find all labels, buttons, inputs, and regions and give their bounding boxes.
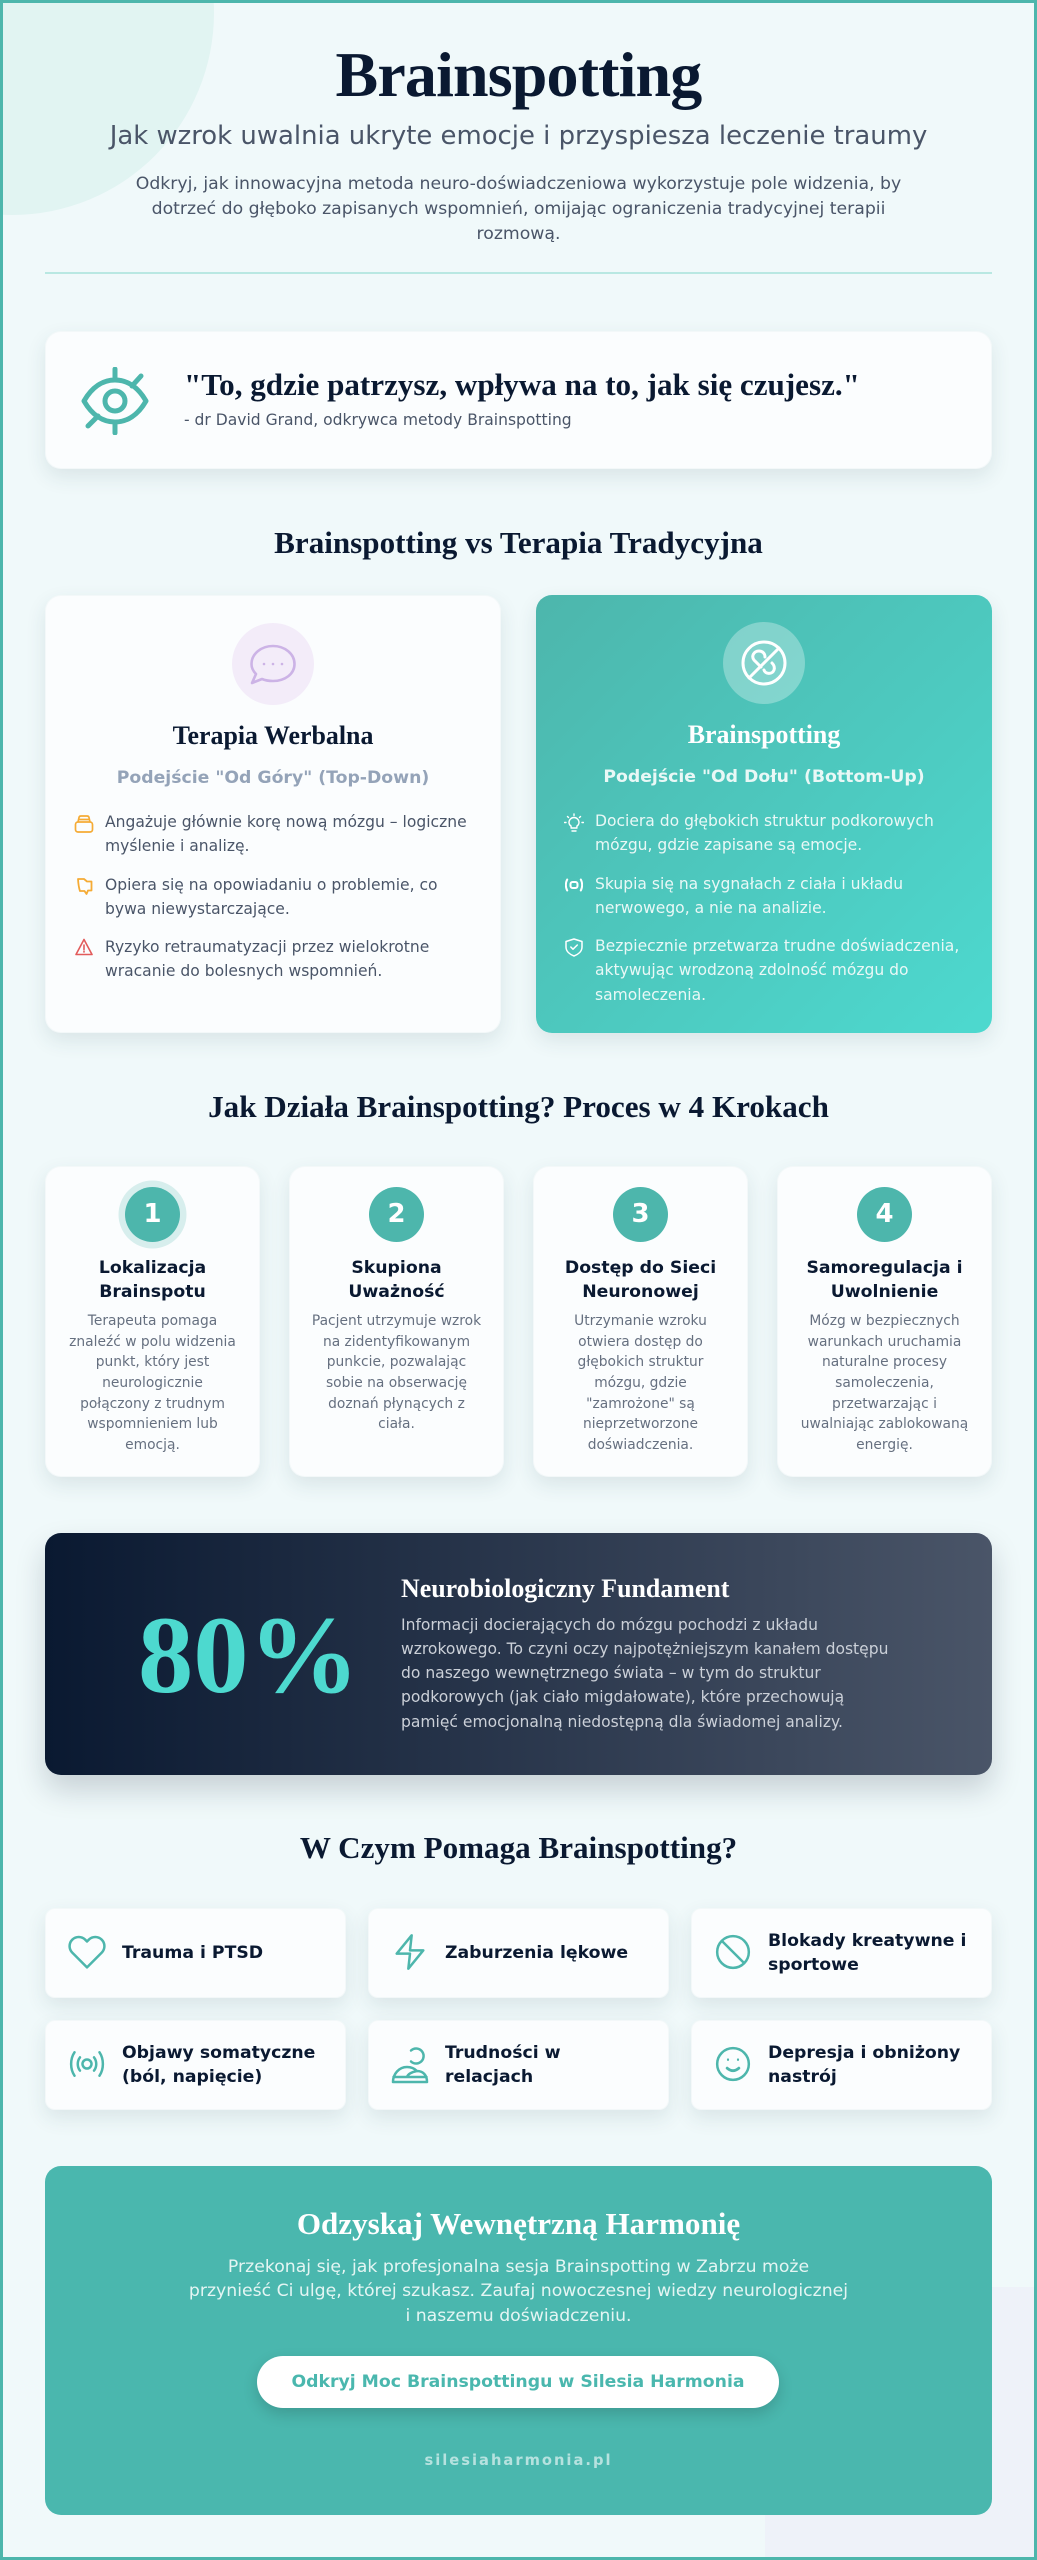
step text: połączony z trudnym [80,1396,225,1412]
step text [574,1313,707,1453]
intro text: Odkryj, jak innowacyjna metoda neuro-doświadczeniowa wykorzystuje pole widzenia, by [136,174,901,194]
label: sportowe [768,1955,859,1975]
label: relacjach [445,2067,533,2087]
list item [105,938,429,980]
item: relations [368,2020,669,2110]
list item: Skupia się na sygnałach z ciała i układu [595,875,903,893]
step title [348,1258,445,1302]
label [445,2043,561,2087]
icon: heart [68,1936,106,1969]
step number [857,1187,912,1242]
label: nastrój [768,2067,837,2087]
label: (ból, napięcie) [122,2067,262,2087]
step title: Uwolnienie [831,1282,938,1302]
subtitle: Jak wzrok uwalnia ukryte emocje i przyspiesza leczenie traumy [110,121,927,151]
label: Trudności w [445,2043,561,2063]
list item: Dociera do głębokich struktur podkorowych [595,812,934,830]
step title: Lokalizacja [99,1258,206,1278]
step text: uwalniając zablokowaną [801,1416,968,1432]
step 2 [289,1166,504,1477]
list item: myślenie i analizę. [105,837,249,855]
step title: Samoregulacja i [806,1258,963,1278]
step text: doświadczenia. [588,1437,693,1453]
heading: comparison: Brainspotting vs Terapia Tradycyjna [274,524,763,560]
quote text: "To, gdzie patrzysz, wpływa na to, jak się czujesz." [184,366,860,402]
heading: applications: W Czym Pomaga Brainspotting? [300,1830,737,1865]
card subtitle: Podejście "Od Góry" (Top-Down) [117,768,429,788]
step number: 4 [875,1199,894,1229]
label [122,2043,315,2087]
icon: radio waves [70,2051,104,2077]
cta text: i naszemu doświadczeniu. [405,2306,632,2326]
step text: głębokich struktur [578,1354,703,1370]
icon: warning triangle [75,938,93,956]
label: Zaburzenia lękowe [445,1943,628,1963]
icon: layers [74,815,94,833]
cta button: Odkryj Moc Brainspottingu w Silesia Harmonia [291,2372,745,2392]
card title: Brainspotting [688,720,840,749]
step text: znaleźć w polu widzenia [69,1334,236,1350]
step text: punkt, który jest [96,1354,209,1370]
step text: punkcie, pozwalając [327,1354,466,1370]
website: silesiaharmonia.pl [424,2452,612,2469]
item: somatic [45,2020,346,2110]
step number: 3 [631,1199,650,1229]
step 4 [777,1166,992,1477]
item: blocks [691,1908,992,1998]
step text: nieprzetworzone [583,1416,698,1432]
icon: person [392,2047,428,2084]
stat text: Informacji docierających do mózgu pochodzi z układu [401,1616,818,1634]
item: depression [691,2020,992,2110]
list item: bywa niewystarczające. [105,900,290,918]
step text: doznań płynących z [328,1396,465,1412]
step title: Dostęp do Sieci [565,1258,716,1278]
step text [312,1313,481,1432]
label: Depresja i obniżony [768,2043,960,2063]
icon: smile [716,2046,750,2082]
cta text: Przekonaj się, jak profesjonalna sesja Brainspotting w Zabrzu może [228,2257,809,2277]
step number [125,1187,180,1242]
cta button [257,2356,779,2408]
stat text: wzrokowego. To czyni oczy najpotężniejszym kanałem dostępu [401,1640,888,1658]
step number: 1 [143,1199,162,1229]
stat text: pamięć emocjonalną niedostępną dla świadomej analizy. [401,1713,843,1731]
cta title: Odzyskaj Wewnętrzną Harmonię [297,2206,740,2240]
step number [613,1187,668,1242]
step title: Neuronowej [582,1282,699,1302]
step title: Skupiona [351,1258,442,1278]
step text: warunkach uruchamia [808,1334,961,1350]
list item: Ryzyko retraumatyzacji przez wielokrotne [105,938,429,956]
heading: process: Jak Działa Brainspotting? Proces w 4 Krokach [208,1089,829,1124]
icon: note [77,878,92,895]
list item [105,812,467,855]
step 3 [533,1166,748,1477]
step text: otwiera dostęp do [578,1334,703,1350]
step number [369,1187,424,1242]
list item [595,937,959,1004]
panel: quote [45,331,992,469]
step title [565,1258,716,1302]
icon: bolt [395,1934,425,1970]
step title: Uważność [348,1282,445,1302]
item: trauma [45,1908,346,1998]
list item: mózgu, gdzie zapisane są emocje. [595,836,862,854]
stat text: podkorowych (jak ciało migdałowate), które przechowują [401,1688,844,1706]
label [768,2043,960,2087]
step title [806,1258,963,1302]
list item: Bezpiecznie przetwarza trudne doświadczenia, [595,937,959,955]
label: Blokady kreatywne i [768,1931,966,1951]
step title [99,1258,206,1302]
step text: emocją. [125,1437,180,1453]
step text [801,1313,968,1453]
stat title: Neurobiologiczny Fundament [401,1574,729,1603]
intro text [136,174,901,244]
intro text: rozmową. [477,224,560,244]
list item: wracanie do bolesnych wspomnień. [105,962,382,980]
panel: verbal therapy [45,595,501,1033]
icon: signal [565,878,583,892]
panel: brainspotting [536,595,992,1033]
title: Brainspotting [336,39,701,110]
list item: Opiera się na opowiadaniu o problemie, co [105,876,438,894]
step text: samoleczenia, [835,1375,934,1391]
icon: shield [565,938,583,957]
panel: call to action [45,2166,992,2515]
big number: 80% [138,1593,359,1716]
card title: Terapia Werbalna [173,721,373,750]
card subtitle: Podejście "Od Dołu" (Bottom-Up) [603,767,925,787]
step number: 2 [387,1199,406,1229]
step text: neurologicznie [102,1375,203,1391]
step text: "zamrożone" są [586,1396,695,1412]
stat text [401,1616,888,1731]
list item: Angażuje głównie korę nową mózgu – logiczne [105,812,467,830]
stat text: do naszego wewnętrznego świata – w tym do struktur [401,1664,821,1682]
list item [105,876,438,918]
icon: ban [716,1934,750,1970]
icon: speech bubble [232,623,314,705]
list item [595,875,903,917]
list item: nerwowego, a nie na analizie. [595,899,827,917]
cta text: przynieść Ci ulgę, której szukasz. Zaufaj nowoczesnej wiedzy neurologicznej [189,2281,848,2301]
step text: wspomnieniem lub [87,1416,218,1432]
step text: mózgu, gdzie [594,1375,687,1391]
step text: Pacjent utrzymuje wzrok [312,1313,481,1329]
list item [595,812,934,854]
list item: aktywując wrodzoną zdolność mózgu do [595,961,909,979]
item: anxiety [368,1908,669,1998]
step text: przetwarzając i [832,1396,937,1412]
step text: na zidentyfikowanym [323,1334,470,1350]
step text: Terapeuta pomaga [88,1313,217,1329]
step 1 [45,1166,260,1477]
intro text: dotrzeć do głęboko zapisanych wspomnień, omijając ograniczenia tradycyjnej terapii [152,199,885,219]
list item: samoleczenia. [595,986,706,1004]
icon: eye [82,367,148,435]
step text [69,1313,236,1453]
step text: naturalne procesy [822,1354,947,1370]
step text: energię. [856,1437,913,1453]
label: Trauma i PTSD [122,1943,263,1963]
cta text [189,2257,848,2326]
icon: brainspotting symbol [723,622,805,704]
step text: Utrzymanie wzroku [574,1313,707,1329]
quote attribution: - dr David Grand, odkrywca metody Brainspotting [184,411,572,429]
label [768,1931,966,1975]
step title: Brainspotu [99,1282,206,1302]
step text: ciała. [378,1416,415,1432]
step text: sobie na obserwację [326,1375,467,1391]
panel: statistic [45,1533,992,1775]
background block bottom-right [765,2287,1037,2560]
background circle top-left [0,0,214,215]
icon: light bulb [564,813,584,832]
label: Objawy somatyczne [122,2043,315,2063]
step text: Mózg w bezpiecznych [809,1313,960,1329]
